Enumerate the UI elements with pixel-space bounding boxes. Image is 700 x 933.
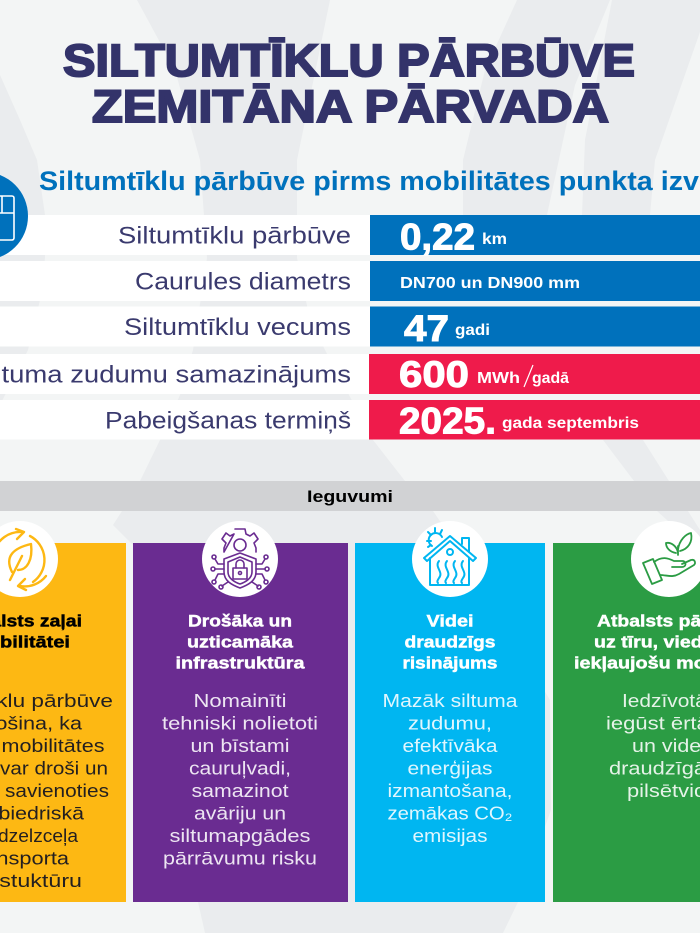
title: SILTUMTĪKLU PĀRBŪVE [63,35,635,86]
row: heat loss reduction: gadā [532,370,569,387]
body text: un bīstami [190,735,290,756]
body text: tehniski nolietoti [162,712,318,734]
body text: Mazāk siltuma [382,690,518,711]
heading [0,612,82,652]
panel: environmentally friendly solution [355,521,545,902]
body text: pilsētvidi [627,780,700,801]
body text: siltumapgādes [170,825,310,846]
icon: hand holding plant [631,521,700,597]
heading [574,612,700,672]
body text: savienoties [5,780,109,801]
body text: Nomainīti [194,690,286,711]
row: completion date: gada septembris [502,415,639,432]
heading: Videi [426,612,474,630]
body text: cauruļvadi, [189,758,291,778]
body text [0,690,113,891]
row: pipeline reconstruction length: km [482,231,507,248]
heading [402,612,498,672]
body text: mobilitātes [2,735,104,756]
row: pipeline age [0,306,700,349]
icon: house with heat and sun [412,521,488,597]
body text: avāriju un [194,802,286,824]
icon: gear, shield and lock [202,521,278,597]
body text [162,690,318,868]
row: completion date: Pabeigšanas termiņš [105,408,351,434]
panel: project data rows [0,215,700,442]
body text [382,690,518,846]
panel: green mobility [0,521,126,902]
body text: pārrāvumu risku [163,848,317,868]
body text: emisijas [412,825,488,846]
body text: zudumu, [408,712,492,734]
panel: safer infrastructure [133,521,348,902]
title [63,35,635,132]
body text: var droši un [0,758,108,778]
row: pipeline age: gadi [455,322,490,339]
body text: enerģijas [408,758,492,778]
heading: risinājums [402,654,498,672]
row: completion date [0,400,700,442]
row: heat loss reduction [0,354,700,395]
row: pipe diameter [0,261,700,301]
panel: clean smart mobility [553,521,700,902]
row: pipe diameter: DN700 un DN900 mm [400,275,580,292]
benefits heading band [0,481,700,511]
row: completion date: 2025. [399,400,496,442]
subtitle: Siltumtīklu pārbūve pirms mobilitātes punkta izv [39,166,699,196]
body text: dzelzceļa [0,825,79,846]
heading: Drošāka un [188,612,292,630]
body text: efektīvāka [402,735,498,756]
body text [606,690,700,801]
heading: infrastruktūra [176,654,305,672]
body text: un videi [632,735,700,756]
row: pipeline age: 47 [404,308,449,349]
icon: blue circle with building [0,172,28,260]
body text: izmantošana, [388,780,512,801]
heading: uzticamāka [187,632,294,652]
body text: samazinot [192,780,288,801]
heading [176,612,305,672]
row: pipeline reconstruction length [0,215,700,258]
title: ZEMITĀNA PĀRVADĀ [92,81,609,132]
row: pipe diameter: Caurules diametrs [135,268,351,296]
row: heat loss reduction: MWh [477,370,520,387]
icon: leaf with circular arrows [0,521,58,597]
row: pipeline reconstruction length: 0,22 [400,216,475,258]
row: pipeline reconstruction length: Siltumtīklu pārbūve [118,222,351,250]
heading: draudzīgs [404,632,496,652]
benefits heading band: Ieguvumi [307,488,393,506]
row: pipeline age: Siltumtīklu vecums [124,314,351,341]
body text: zemākas CO₂ [388,802,512,824]
row: heat loss reduction: 600 [399,354,469,395]
